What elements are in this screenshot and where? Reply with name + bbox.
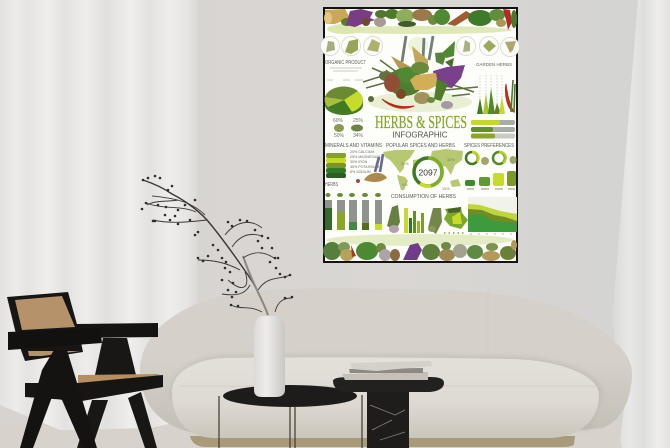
sofa base <box>190 436 575 447</box>
heading: consumption of herbs: CONSUMPTION OF HERBS <box>391 194 457 200</box>
herb circles right <box>456 36 520 56</box>
lavender and ginger illustration <box>356 154 387 183</box>
coffee table legs <box>219 395 362 448</box>
map percent labels: 15% <box>442 187 450 191</box>
branch with berries <box>141 175 293 315</box>
floor <box>0 424 670 448</box>
sofa back <box>140 288 632 432</box>
vertical level bars <box>325 200 382 230</box>
chair center post <box>95 338 136 375</box>
minerals legend: 30% IRON <box>350 160 368 164</box>
heading: herbs: HERBS <box>325 182 338 188</box>
progress bars <box>471 120 515 138</box>
heading: popular spices and herbs: POPULAR SPICES AND HERBS <box>386 143 455 149</box>
percent labels and icons <box>333 118 364 139</box>
chair <box>7 292 163 448</box>
spice cylinder chart <box>465 171 516 189</box>
herb sprig illustration <box>428 208 442 234</box>
percent labels and icons: 25% <box>353 118 364 124</box>
sofa <box>140 288 632 447</box>
vase <box>254 316 285 397</box>
chair seat cane <box>78 374 163 388</box>
heading: organic product: ORGANIC PRODUCT <box>325 60 366 66</box>
sofa seam <box>180 291 598 386</box>
map percent labels: 25% <box>401 162 409 166</box>
garden herbs triangle chart <box>477 75 505 114</box>
minerals legend: 25% MAGNESIUM <box>350 155 380 159</box>
right curtain <box>612 0 670 448</box>
leaf icons row <box>326 193 381 197</box>
mortar pie chart <box>444 207 468 233</box>
minerals stacked layers <box>326 153 346 178</box>
chili and herb right <box>505 80 515 112</box>
herb bunch illustration <box>387 205 400 233</box>
stack of books <box>342 361 432 380</box>
heading: spices preferences: SPICES PREFERENCES <box>464 143 514 149</box>
side table column <box>367 390 409 448</box>
minerals legend: 45% POTASSIUM <box>350 165 379 169</box>
poster <box>320 7 520 263</box>
central herb bouquet <box>363 36 478 112</box>
title: herbs and spices: HERBS & SPICES <box>375 112 467 132</box>
marble veins <box>370 405 405 440</box>
chair back frame <box>7 292 83 361</box>
donut chart with 2097 <box>414 158 442 186</box>
area chart <box>468 197 517 234</box>
organic product text lines <box>327 68 363 80</box>
chair lower rear legs <box>77 392 157 448</box>
heading: garden herbs: GARDEN HERBS <box>476 62 512 67</box>
chair front arm <box>8 328 102 350</box>
bottom herb border <box>323 234 517 261</box>
top herb border <box>324 9 517 34</box>
map percent labels: 30% <box>447 158 455 162</box>
map percent labels: 4% <box>402 183 408 187</box>
small herb icons <box>481 156 516 165</box>
sofa seat cushion <box>172 357 599 438</box>
coffee table <box>219 316 362 448</box>
heading: minerals and vitamins: MINERALS AND VITAMINS <box>325 143 382 149</box>
poster paper <box>325 9 516 261</box>
poster frame <box>323 7 518 263</box>
side table with books <box>333 361 444 448</box>
minerals legend: 8% SODIUM <box>350 170 371 174</box>
percent labels and icons: 50% <box>334 133 345 139</box>
consumption bar chart <box>404 208 424 233</box>
subtitle: INFOGRAPHIC <box>392 130 448 140</box>
chair seat frame <box>25 375 163 401</box>
coffee table top <box>223 385 357 407</box>
sofa seat shadow <box>170 354 603 430</box>
chair lower cane <box>28 351 81 356</box>
chair back cane <box>15 296 75 330</box>
world map <box>383 149 463 190</box>
left curtain <box>0 0 197 430</box>
pie chart <box>325 87 363 115</box>
herb circles left <box>320 36 382 56</box>
donut chart with 2097: 2097 <box>419 168 438 178</box>
map percent labels <box>401 158 455 191</box>
chair rear arm <box>77 323 158 338</box>
minerals legend: 25% CALCIUM <box>350 150 374 154</box>
chair front legs <box>20 350 97 448</box>
percent labels and icons: 60% <box>333 118 344 124</box>
percent labels and icons: 34% <box>353 133 364 139</box>
side table top <box>333 377 444 392</box>
minerals legend <box>350 150 380 174</box>
preference rings <box>466 152 506 164</box>
